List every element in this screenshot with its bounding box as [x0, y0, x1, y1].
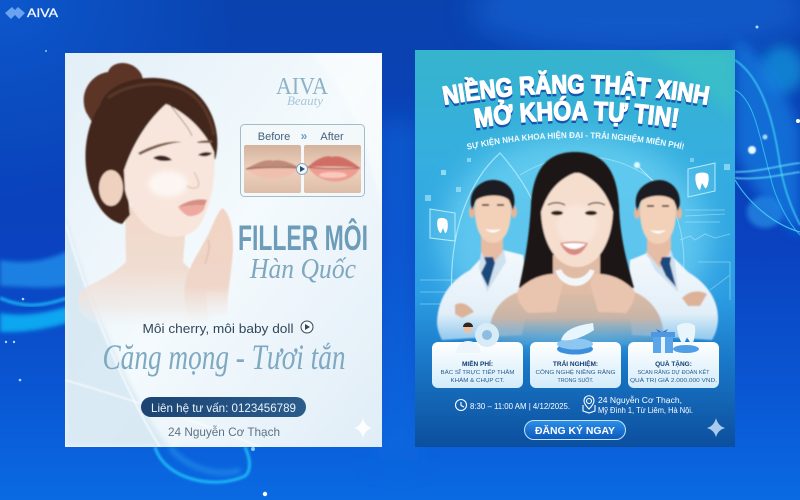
face: [124, 104, 214, 237]
bokeh dots: [748, 146, 756, 154]
brand: AIVA Beauty: Beauty: [287, 93, 323, 108]
subtitle: SỰ KIỆN NHA KHOA HIỆN ĐẠI - TRẢI NGHIỆM MIỄN PHÍ!: [466, 130, 684, 150]
card: free consultation: [432, 322, 523, 388]
icon: gift box and tooth: [651, 323, 699, 353]
before and after lip comparison: [240, 124, 364, 196]
card: gift: QUÀ TRỊ GIÁ 2.000.000 VND.: [630, 377, 718, 384]
heading: Filler Môi Hàn Quốc: [238, 218, 368, 285]
icon: clear aligner on pedestal: [557, 323, 594, 354]
title: NIỀNG RĂNG THẬT XINH: [442, 70, 710, 108]
icon: map pin: [583, 396, 595, 413]
event location: 24 Nguyễn Cơ Thạch,: [598, 396, 682, 405]
card: gift: QUÀ TẶNG:: [655, 359, 692, 368]
hair: [85, 78, 217, 224]
call to action button: ĐĂNG KÝ NGAY: [535, 424, 615, 437]
contact pill: Liên hệ tư vấn: 0123456789: [151, 401, 296, 415]
fringe: [155, 114, 156, 115]
card: experience: TRONG SUỐT.: [558, 377, 594, 384]
event location: [583, 396, 693, 415]
aligner: [556, 270, 594, 285]
icon: sparkle: [354, 418, 372, 438]
lips: [178, 199, 207, 207]
icon: play: [296, 164, 308, 174]
patient: woman with clear aligner: [489, 152, 663, 345]
heading: Filler Môi Hàn Quốc: FILLER MÔI: [238, 218, 368, 258]
card: experience: TRẢI NGHIỆM:: [553, 359, 598, 368]
portrait: woman with hair bun: [78, 63, 233, 332]
hand: [184, 208, 233, 320]
before and after lip comparison: After: [320, 131, 344, 143]
heading: Filler Môi Hàn Quốc: Hàn Quốc: [249, 254, 357, 285]
chest: [489, 290, 663, 345]
icon: play circle: [301, 321, 313, 333]
card: free consultation: BÁC SĨ TRỰC TIẾP THĂM: [440, 369, 515, 376]
light bands left: [0, 250, 70, 288]
light arc bottom: [155, 447, 250, 482]
icon: tooth right: [688, 163, 715, 197]
card: gift: [628, 323, 719, 388]
event location: Mỹ Đình 1, Từ Liêm, Hà Nội.: [598, 406, 693, 415]
tech background: [420, 135, 730, 345]
card: free consultation: MIỄN PHÍ:: [462, 359, 493, 368]
card: free consultation: KHÁM & CHỤP CT.: [450, 377, 505, 384]
icon: tooth left: [430, 209, 455, 241]
icon: doctor and CT scanner: [456, 322, 499, 353]
event time: 8:30 – 11:00 AM | 4/12/2025.: [470, 402, 570, 411]
brows and eyes: [138, 142, 182, 155]
doctor: right: [628, 180, 718, 340]
icon: AIVA logo mark: [5, 7, 25, 19]
title: MỞ KHÓA TỰ TIN!: [474, 96, 679, 130]
hands: [517, 274, 563, 313]
icon: clock: [456, 400, 466, 410]
panel: lip filler poster: [65, 53, 382, 447]
contact pill: [141, 397, 306, 417]
hair bun: [84, 63, 143, 122]
card: experience: [530, 323, 621, 388]
nose: [187, 172, 199, 188]
brand: AIVA Beauty: [276, 78, 328, 108]
light streaks right: [760, 46, 800, 94]
brand logo: AIVA: [5, 7, 58, 20]
text: cherry lips: Môi cherry, môi baby doll: [142, 321, 294, 336]
before and after lip comparison: Before: [258, 131, 290, 143]
call to action button: [524, 420, 626, 440]
icon: sparkle: [707, 418, 725, 437]
address: 24 Nguyễn Cơ Thạch: [168, 424, 280, 439]
before and after lip comparison: »: [301, 129, 308, 143]
doctor: left: [437, 180, 530, 340]
panel: orthodontics poster: [415, 50, 735, 447]
title: [442, 70, 710, 130]
card: experience: CÔNG NGHỆ NIỀNG RĂNG: [536, 368, 616, 376]
neck and shoulders: [78, 206, 206, 318]
hair: [519, 152, 634, 288]
slogan: Căng mọng - Tươi tắn: [102, 337, 346, 377]
brand: AIVA Beauty: AIVA: [276, 74, 329, 100]
event time: [456, 400, 570, 411]
neck: [553, 255, 600, 294]
card: gift: SCAN RĂNG DỰ ĐOÁN KẾT: [638, 369, 710, 376]
ear: [99, 170, 123, 206]
face: [541, 173, 613, 267]
brand logo: AIVA: AIVA: [27, 8, 58, 20]
